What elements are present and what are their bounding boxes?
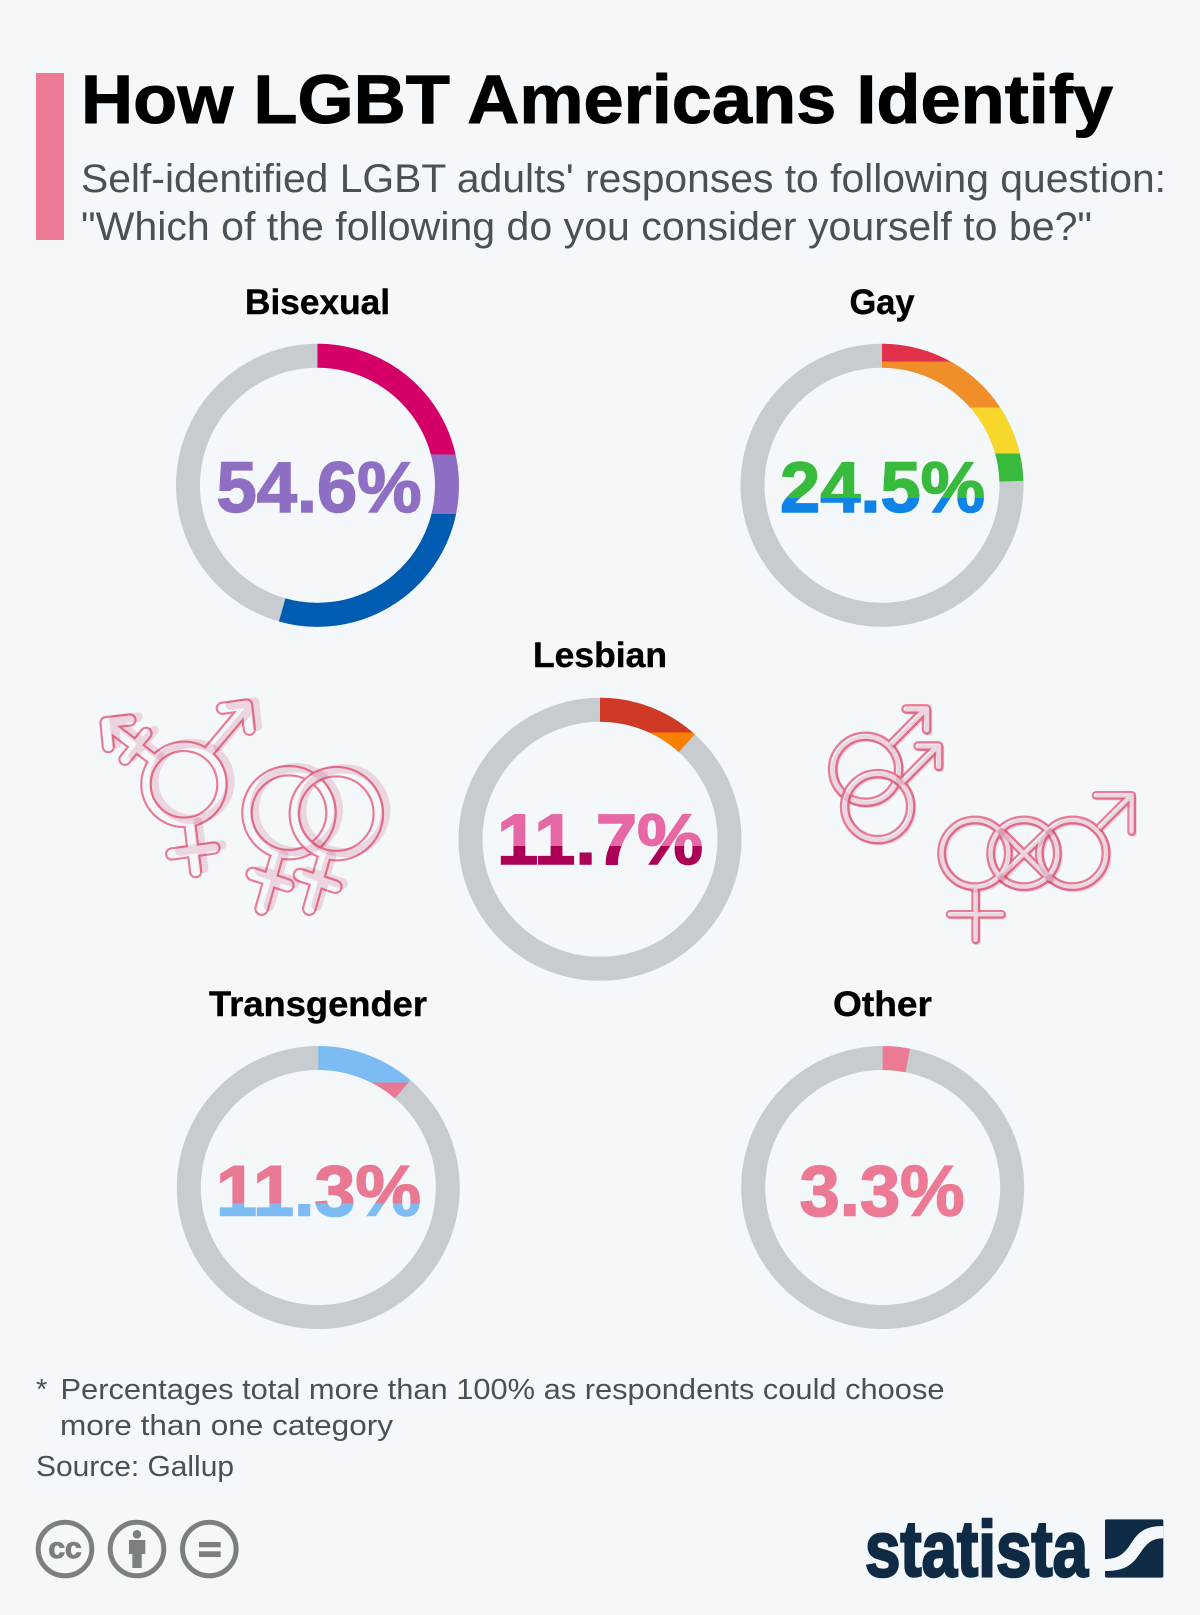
icon: right symbols shadow [835,711,1134,942]
value: 3.3%: 3.3% [800,1152,964,1232]
footnote: Percentages total more than 100% as respondents could choose [60,1374,944,1406]
footnote: * [36,1374,47,1406]
donut chart: other 3.3% [753,1058,1012,1317]
donut panel: transgender [189,985,448,1317]
heading: gay: Gay [850,283,915,322]
donut chart: gay 24.5% [752,356,1012,615]
icon: cc: cc [48,1532,82,1565]
value: 11.3%: 11.3% [216,1152,421,1232]
subtitle [81,157,1166,249]
donut panel: lesbian [470,636,730,969]
donut chart: bisexual 54.6% [188,356,447,615]
icon: cc [38,1522,92,1576]
subtitle: "Which of the following do you consider yourself to be?" [81,205,1092,249]
icon: transgender symbol [106,702,257,872]
donut chart: lesbian 11.7% [470,710,730,969]
logo mark [1105,1519,1163,1578]
icon: gay male and bisexual symbols [833,709,1134,942]
icon: second female symbol [294,772,378,909]
heading: bisexual: Bisexual [245,283,390,322]
icon: second male symbol [845,746,939,840]
heading: lesbian: Lesbian [533,636,667,675]
statista logo [865,1504,1163,1593]
icon: female symbols shadow [254,768,386,906]
footnote [36,1374,944,1442]
subtitle: Self-identified LGBT adults' responses to following question: [81,157,1166,201]
donut panel: bisexual [188,283,447,615]
icon: first female symbol [247,771,331,909]
logo wordmark: statista [865,1504,1089,1593]
title: How LGBT Americans Identify [81,61,1113,138]
icon: creative commons licence [38,1522,236,1576]
icon: attribution [110,1522,164,1576]
heading: transgender: Transgender [209,985,427,1024]
donut panel: other [753,985,1012,1317]
footnote: more than one category [60,1410,394,1442]
value: 11.7%: 11.7% [497,801,703,880]
icon: transgender and lesbian symbols [106,702,386,909]
value: 24.5%: 24.5% [780,449,985,528]
value: 54.6%: 54.6% [216,449,422,528]
heading: other: Other [833,985,932,1024]
icon: bisexual symbol [942,795,1132,940]
title accent bar [36,73,64,240]
donut panel: gay [752,283,1012,615]
source: Source: Gallup [36,1451,234,1483]
donut chart: transgender 11.3% [189,1058,448,1317]
icon: first male symbol [833,709,927,802]
icon: no derivatives [182,1522,236,1576]
